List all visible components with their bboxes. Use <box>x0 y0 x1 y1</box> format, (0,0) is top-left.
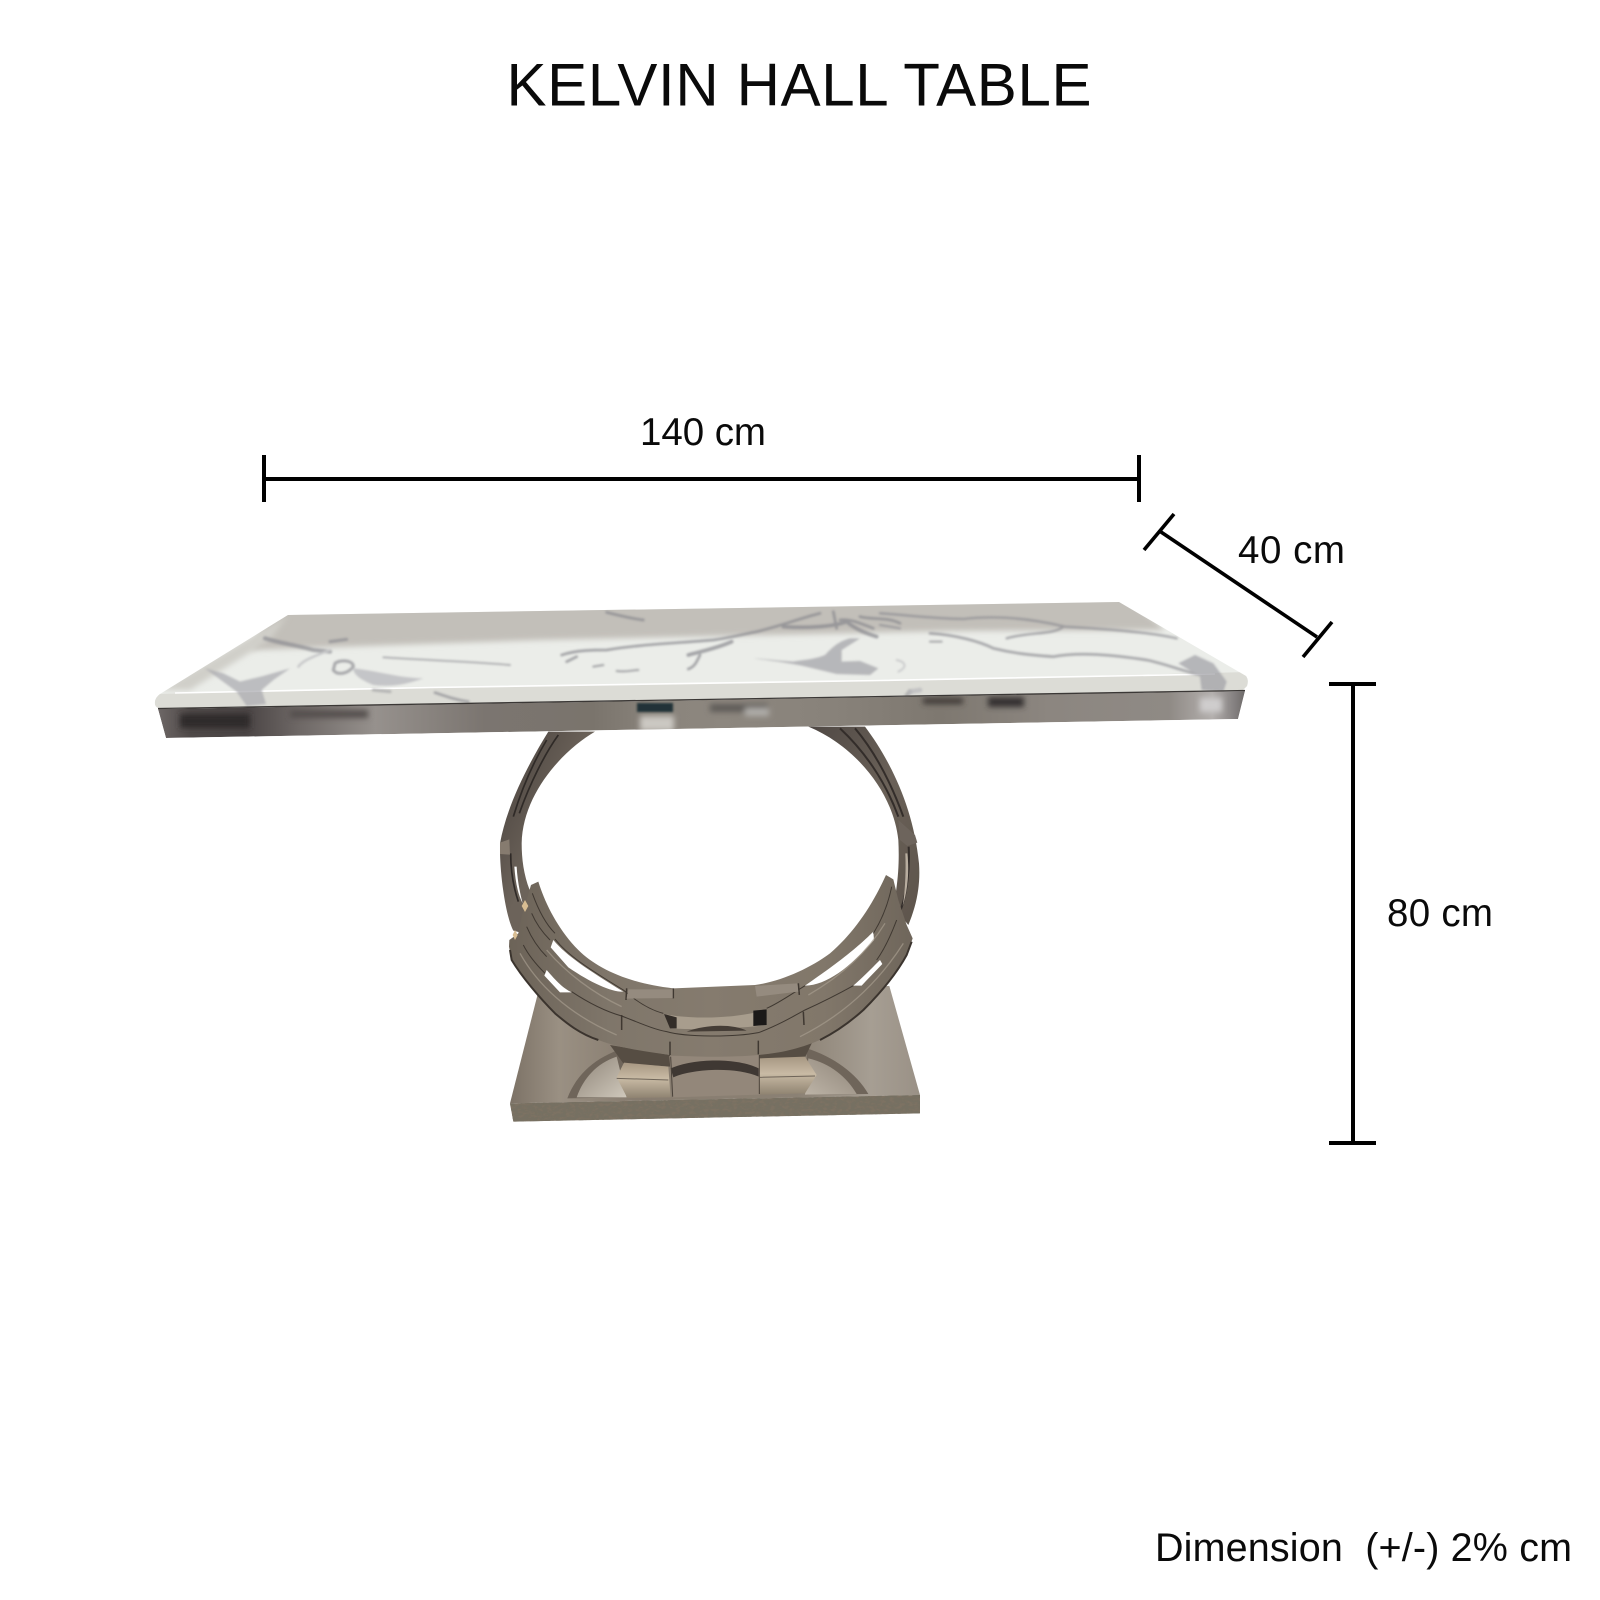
marble veins, right <box>880 613 1227 692</box>
gaps between bands <box>544 932 882 992</box>
center foot blocks <box>617 1054 817 1098</box>
marble veins, center <box>562 612 910 695</box>
central dark opening <box>664 1009 767 1032</box>
apron reflections <box>180 697 1222 731</box>
table top: marble slab <box>154 602 1248 708</box>
bevel highlight <box>175 674 1215 693</box>
outer edge shadow <box>510 942 912 1040</box>
lower ring: stacked bands <box>509 875 913 1057</box>
apron dark glint <box>637 703 673 712</box>
base plate reflections <box>567 1040 868 1098</box>
width dimension: 140 cm <box>264 411 1139 502</box>
gold glints <box>513 900 528 940</box>
title: KELVIN HALL TABLE <box>506 52 1092 118</box>
marble veins, left <box>205 638 510 706</box>
width dimension line <box>264 455 1139 502</box>
left edge shading <box>166 621 282 692</box>
base plate top surface <box>510 986 920 1103</box>
height dimension: 80 cm <box>1329 684 1493 1143</box>
base plate front edge <box>510 1095 920 1122</box>
upper ring, right <box>808 727 919 925</box>
table top: steel apron <box>158 691 1245 738</box>
height label: 80 cm <box>1387 892 1493 935</box>
rear shadow band <box>250 595 1165 650</box>
depth dimension: 40 cm <box>1144 514 1345 657</box>
height dimension line <box>1329 684 1376 1143</box>
width label: 140 cm <box>640 411 766 454</box>
upper ring, left <box>500 732 595 933</box>
table base: plate and ring <box>500 727 920 1122</box>
depth label: 40 cm <box>1238 529 1345 572</box>
table illustration <box>150 590 1250 1122</box>
seam between marble and apron <box>158 690 1245 708</box>
tolerance note: Dimension (+/-) 2% cm <box>1155 1526 1572 1570</box>
band highlights <box>520 923 903 1037</box>
raised block highlights <box>627 983 798 999</box>
front bevel <box>155 672 1248 710</box>
band shading lines <box>523 887 897 1055</box>
depth dimension line <box>1144 514 1332 657</box>
